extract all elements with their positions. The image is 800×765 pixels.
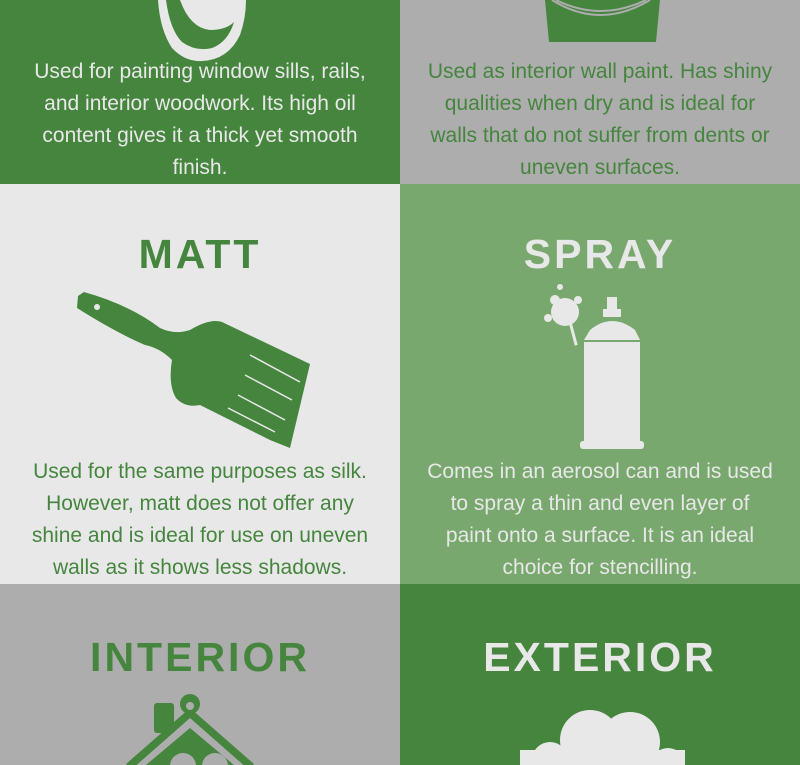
- heading: interior: INTERIOR: [90, 634, 310, 680]
- icon: spray can: [544, 284, 644, 449]
- icon: paintbrush: [77, 292, 310, 448]
- text: silk: walls that do not suffer from dents or: [430, 124, 770, 147]
- text: spray: [427, 460, 773, 579]
- text: spray: to spray a thin and even layer of: [451, 492, 749, 515]
- text: silk: uneven surfaces.: [520, 156, 680, 179]
- text: spray: Comes in an aerosol can and is used: [427, 460, 773, 483]
- heading: matt: MATT: [139, 231, 261, 277]
- text: gloss: Used for painting window sills, rails,: [34, 60, 366, 83]
- panel: gloss: [0, 0, 400, 184]
- text: silk: Used as interior wall paint. Has shiny: [428, 60, 772, 83]
- heading: exterior: EXTERIOR: [483, 634, 717, 680]
- panel: exterior: [400, 584, 800, 765]
- icon: gloss pot: [158, 0, 246, 61]
- panel: matt: [0, 184, 400, 584]
- text: matt: [32, 460, 368, 579]
- text: gloss: and interior woodwork. Its high oil: [44, 92, 356, 115]
- icon: silk bucket: [545, 0, 660, 42]
- panel: silk: [400, 0, 800, 184]
- heading: spray: SPRAY: [524, 231, 676, 277]
- text: gloss: [34, 60, 366, 179]
- icon: house: [126, 694, 254, 765]
- text: matt: Used for the same purposes as silk.: [33, 460, 367, 483]
- text: spray: paint onto a surface. It is an ideal: [446, 524, 754, 547]
- text: matt: walls as it shows less shadows.: [53, 556, 347, 579]
- text: silk: qualities when dry and is ideal for: [445, 92, 755, 115]
- icon: cloud: [520, 710, 685, 765]
- panel: spray: [400, 184, 800, 584]
- text: gloss: content gives it a thick yet smooth: [42, 124, 358, 147]
- panel: interior: [0, 584, 400, 765]
- text: matt: However, matt does not offer any: [46, 492, 354, 515]
- text: matt: shine and is ideal for use on uneven: [32, 524, 368, 547]
- text: spray: choice for stencilling.: [503, 556, 697, 579]
- text: silk: [428, 60, 772, 179]
- text: gloss: finish.: [173, 156, 227, 179]
